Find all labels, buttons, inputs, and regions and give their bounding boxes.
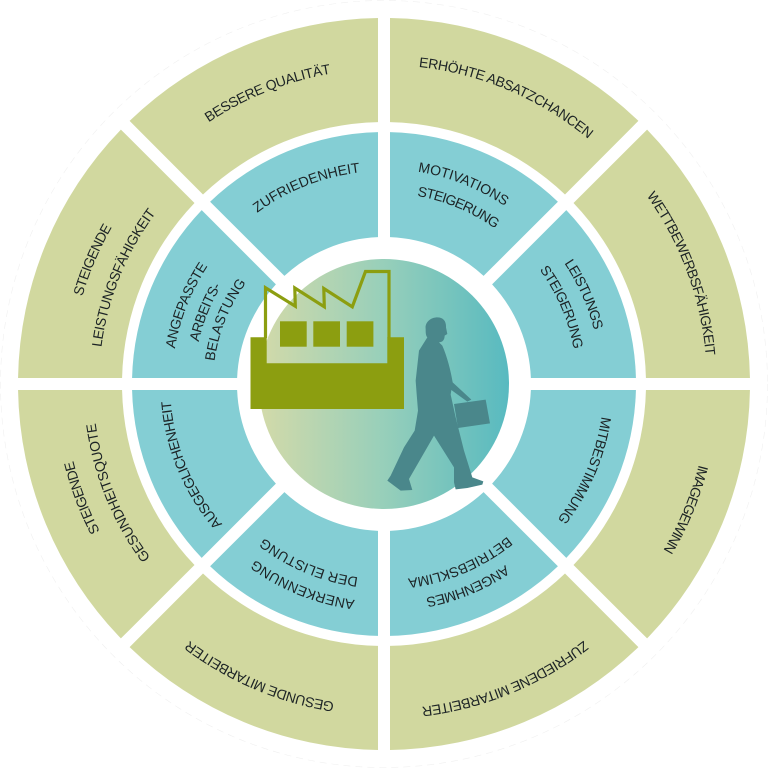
panel: Zufriedene Mitarbeiter: ZUFRIEDENE MITARBEITER [422, 640, 589, 716]
panel: Angepasste Arbeitsbelastung: BELASTUNG [205, 279, 244, 360]
panel: Ausgeglichenheit [132, 390, 276, 558]
panel: Mitbestimmung [492, 390, 636, 558]
panel: Erhöhte Absatzchancen [390, 18, 638, 194]
panel: Motivationssteigerung [390, 132, 558, 276]
panel: Wettbewerbsfähigkeit [574, 130, 750, 378]
panel: Angenehmes Betriebsklima: ANGENHMES [426, 565, 508, 607]
panel: Leistungssteigerung: STEIGERUNG [541, 266, 582, 348]
panel: Motivationssteigerung: MOTIVATIONS [418, 162, 508, 205]
panel: Bessere Qualität: BESSERE QUALITÄT [204, 64, 329, 122]
panel: Mitbestimmung: MITBESTIMMUNG [559, 418, 611, 524]
panel: Imagegewinn: IMAGEGEWINN [664, 466, 708, 554]
panel: Angenehmes Betriebsklima: BETRIEBSKLIMA [408, 537, 512, 588]
panel: Erhöhte Absatzchancen: ERHÖHTE ABSATZCHANCEN [420, 58, 594, 138]
panel: Angenehmes Betriebsklima [390, 492, 558, 636]
panel: Motivationssteigerung: STEIGERUNG [418, 187, 499, 227]
panel: Angepasste Arbeitsbelastung: ARBEITS- [190, 284, 218, 342]
panel: Ausgeglichenheit: AUSGEGLICHENHEIT [161, 402, 222, 528]
panel: Anerkennung der Leistung [210, 492, 378, 636]
panel: Angepasste Arbeitsbelastung [132, 210, 276, 378]
icon: factory [250, 272, 404, 409]
panel: Zufriedenheit [210, 132, 378, 276]
panel: Zufriedenheit: ZUFRIEDENHEIT [252, 162, 359, 212]
panel: Bessere Qualität [130, 18, 378, 194]
center gradient circle [259, 259, 509, 509]
panel: Steigende Gesundheitsquote: GESUNDHEITSQUOTE [86, 424, 148, 562]
panel: Imagegewinn [574, 390, 750, 638]
panel: Anerkennung der Leistung: DER ELISTUNG [260, 540, 358, 587]
panel: Steigende Gesundheitsquote [18, 390, 194, 638]
panel: Anerkennung der Leistung: ANERKENNUNG [252, 561, 355, 609]
panel: Steigende Gesundheitsquote: STEIGENDE [64, 461, 99, 534]
panel: Angepasste Arbeitsbelastung: ANGEPASSTE [166, 262, 208, 349]
panel: Wettbewerbsfähigkeit: WETTBEWERBSFÄHIGKEIT [648, 190, 716, 354]
panel: Gesunde Mitarbeiter [130, 574, 378, 750]
panel: Steigende Leistungsfähigkeit [18, 130, 194, 378]
panel: Zufriedene Mitarbeiter [390, 574, 638, 750]
panel: Leistungssteigerung: LEISTUNGS [564, 258, 603, 329]
panel: Steigende Leistungsfähigkeit: LEISTUNGSFÄHIGKEIT [92, 208, 154, 346]
panel: Leistungssteigerung [492, 210, 636, 378]
panel: Steigende Leistungsfähigkeit: STEIGENDE [74, 223, 112, 296]
panel: Gesunde Mitarbeiter: GESUNDE MITARBEITER [186, 640, 333, 711]
icon: walking person with briefcase [387, 317, 490, 491]
